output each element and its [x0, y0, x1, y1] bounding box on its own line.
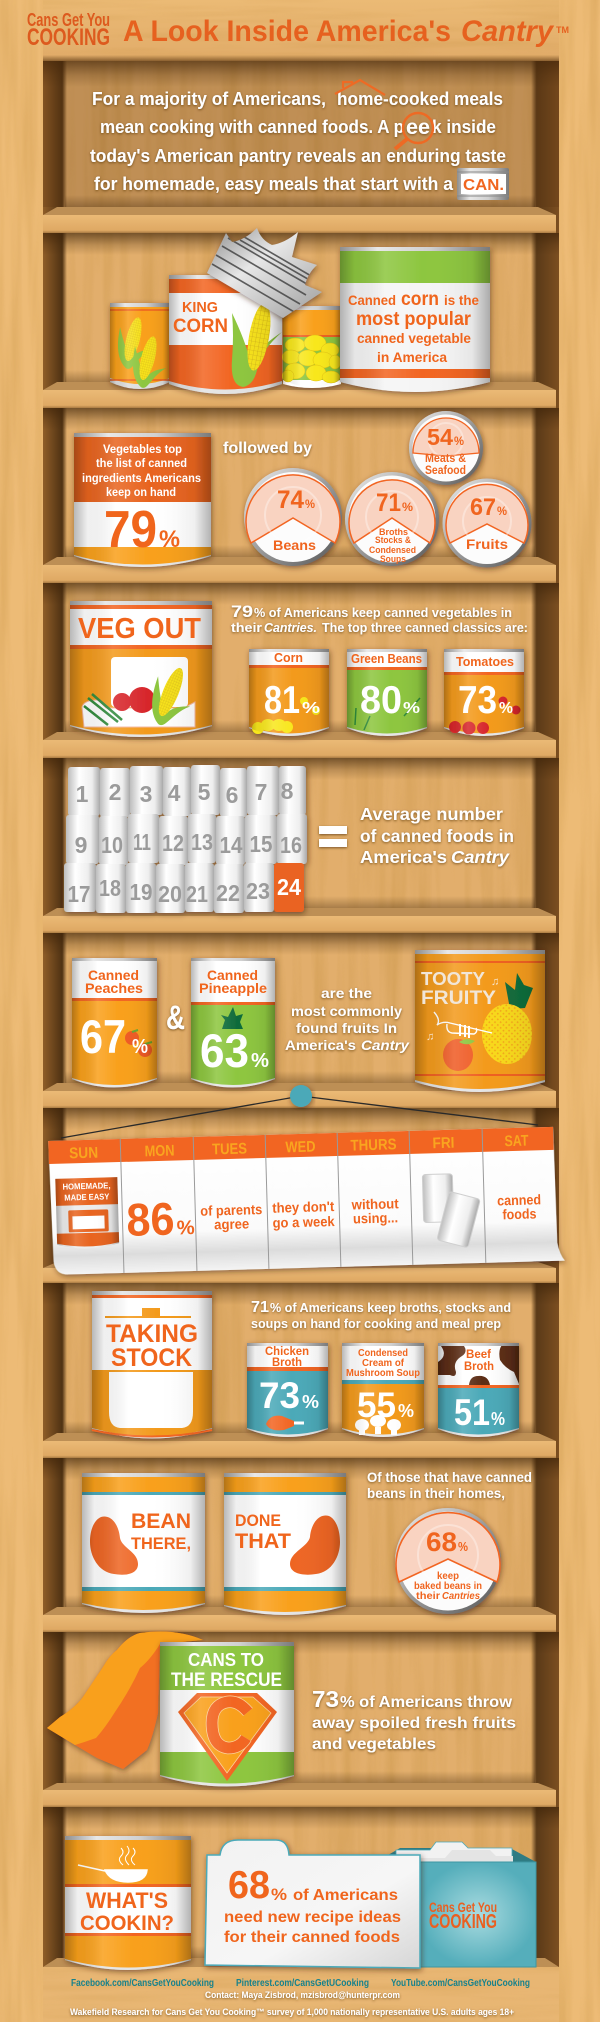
can: beef broth 51%: Broth	[464, 1361, 494, 1373]
stack of 24 cans: 2	[109, 779, 121, 805]
can: tomatoes 73%: Tomatoes	[456, 655, 514, 669]
can: green beans 80%	[347, 649, 427, 736]
intro paragraph: mean cooking with canned foods. A p	[100, 117, 404, 137]
can: Bean There: BEAN	[131, 1510, 191, 1533]
lid: 68% baked beans: baked beans in	[414, 1581, 482, 1592]
folder logo	[429, 1899, 497, 1933]
recipe folder	[383, 1842, 536, 1967]
can: beef broth 51%: %	[491, 1409, 505, 1429]
can: canned pineapple 63%: Pineapple	[199, 980, 267, 996]
footer contact and source: Contact: Maya Zisbrod, mzisbrod@hunterpr.com	[205, 1990, 400, 2000]
recipe card: 68	[228, 1864, 270, 1907]
intro paragraph: For a majority of Americans,	[92, 89, 326, 109]
recipe card: of Americans	[293, 1887, 398, 1904]
text: average number of canned foods: Average number	[360, 804, 503, 824]
logo: Cans Get You Cooking: COOKING	[27, 24, 110, 51]
lid: 74% beans: 74	[277, 486, 304, 514]
icon: bean	[290, 1516, 340, 1575]
stack of 24 cans: 18	[99, 875, 121, 901]
can: What's Cookin?: COOKIN?	[80, 1912, 174, 1935]
recipe card: need new recipe ideas	[224, 1909, 401, 1926]
lid: 74% beans: Beans	[273, 537, 316, 553]
can: condensed cream of mushroom soup 55%: Condensed	[358, 1347, 408, 1359]
lid: 71% broths, stocks and soups: Condensed	[369, 545, 416, 555]
text: most commonly found fruits: are the	[321, 985, 372, 1001]
calendar: canned	[497, 1191, 541, 1208]
can: canned corn is the most popular: in America	[377, 349, 447, 365]
can-lid label: CAN.: CAN.	[463, 177, 504, 194]
can: chicken broth 73%: 73	[259, 1375, 300, 1416]
can: vegetables top the list: ingredients Americans	[82, 473, 201, 485]
folder logo: COOKING	[429, 1911, 497, 1933]
stack of 24 cans: 13	[191, 829, 213, 855]
can: canned pineapple 63%	[191, 958, 275, 1088]
footer links: Pinterest.com/CansGetUCooking	[236, 1978, 369, 1989]
calendar day headers: TUES	[212, 1140, 247, 1158]
cow spots	[438, 1345, 519, 1385]
intro paragraph: home-cooked meals	[337, 89, 503, 109]
stack of 24 cans: 5	[198, 779, 211, 805]
lid: 71% broths, stocks and soups: Broths	[379, 527, 408, 537]
icon: house roof over "home"	[335, 80, 385, 95]
can: King Corn	[169, 275, 282, 394]
can: chicken broth 73%: Broth	[272, 1357, 302, 1369]
title: Cantry	[461, 15, 554, 48]
lid: 54% meats and seafood: 54	[427, 424, 453, 450]
lid: 54% meats and seafood: Meats &	[425, 453, 466, 465]
title: TM	[556, 25, 569, 35]
can: canned corn is the most popular: is the	[444, 292, 479, 308]
can: vegetables top the list	[74, 433, 211, 567]
icon: peach	[443, 1039, 475, 1071]
can: beef broth 51%	[438, 1343, 519, 1437]
text: 71% keep broths, stocks and soups: soups on hand for cooking and meal prep	[251, 1317, 501, 1331]
can: Taking Stock: STOCK	[111, 1344, 192, 1372]
calendar day headers	[69, 1133, 529, 1162]
stack of 24 cans: 14	[220, 832, 243, 858]
can: beef broth 51%: 51	[454, 1392, 490, 1433]
stack of 24 cans: 15	[250, 831, 273, 857]
can: vegetables top the list: 79	[104, 501, 157, 559]
can: vegetables top the list: %	[159, 526, 180, 553]
can: chicken broth 73%: Chicken	[265, 1346, 309, 1358]
stack of 24 cans: 1	[76, 781, 89, 807]
calendar day headers: MON	[144, 1142, 175, 1160]
can: Cans to the Rescue: CANS TO	[188, 1650, 264, 1670]
can: Taking Stock: TAKING	[106, 1320, 198, 1348]
footer links: Facebook.com/CansGetYouCooking	[71, 1978, 214, 1989]
lid: 68% baked beans: their	[416, 1591, 440, 1602]
recipe card	[205, 1840, 420, 1968]
footer links	[71, 1978, 530, 1989]
can: Done That: THAT	[235, 1530, 291, 1553]
calendar: using...	[353, 1209, 398, 1227]
icon: magnifying glass	[395, 113, 433, 149]
icon: superhero C emblem	[178, 1693, 277, 1781]
can: vegetables top the list: keep on hand	[106, 487, 176, 499]
stack of 24 cans: 10	[101, 832, 123, 858]
lid: 68% baked beans: keep	[437, 1571, 459, 1582]
calendar: 86	[126, 1193, 175, 1246]
can: corn 81%: %	[302, 700, 320, 717]
can: condensed cream of mushroom soup 55%: Mushroom Soup	[346, 1367, 420, 1379]
can: tomatoes 73%: %	[499, 700, 513, 717]
lid: 67% fruits: 67	[470, 494, 496, 521]
stack of 24 cans: 7	[255, 779, 267, 805]
text: 73% throw away spoiled produce: % of Americans throw	[340, 1694, 513, 1711]
calendar: go a week	[272, 1213, 335, 1231]
calendar: %	[176, 1217, 195, 1239]
icon: mushrooms	[355, 1415, 401, 1435]
stack of 24 cans: 9	[75, 832, 87, 858]
can: Cans to the Rescue: THE RESCUE	[171, 1669, 282, 1691]
can: canned peaches 67%: Canned	[88, 967, 139, 983]
lid: 74% beans: %	[305, 497, 315, 511]
lid: 68% baked beans	[395, 1508, 501, 1614]
footer contact and source	[70, 1990, 514, 2017]
can: condensed cream of mushroom soup 55%: Cream of	[362, 1357, 404, 1369]
stack of 24 cans: 20	[158, 881, 182, 907]
text: 71% keep broths, stocks and soups	[251, 1299, 511, 1331]
lid: 54% meats and seafood: %	[454, 434, 464, 448]
mini can: homemade, made easy: HOMEMADE,	[62, 1180, 111, 1192]
can: canned pineapple 63%: 63	[200, 1024, 249, 1077]
can: vegetables top the list: Vegetables top	[103, 444, 182, 456]
lid: 74% beans	[244, 468, 342, 566]
text: most commonly found fruits: found fruits In	[296, 1020, 397, 1036]
text: 73% throw away spoiled produce	[312, 1686, 516, 1753]
lid: 68% baked beans: 68	[426, 1527, 457, 1557]
stack of 24 cans: 4	[168, 780, 181, 806]
stack of 24 cans: 8	[281, 778, 294, 804]
can: Tooty Fruity: FRUITY	[421, 988, 496, 1009]
text: 79% keep canned vegetables: Cantries.	[264, 621, 317, 635]
recipe card: %	[271, 1885, 287, 1904]
text: 79% keep canned vegetables: The top three canned classics are:	[322, 621, 528, 635]
footer contact and source: Wakefield Research for Cans Get You Cooking™ survey of 1,000 nationally representative U.S. adults ages 18+	[70, 2007, 514, 2017]
can: Bean There: THERE,	[131, 1534, 191, 1553]
recipe card: for their canned foods	[224, 1929, 400, 1946]
can: canned pineapple 63%: Canned	[207, 967, 258, 983]
stack of 24 cans	[64, 765, 307, 913]
stack of 24 cans: 24	[277, 874, 301, 900]
lid: 68% baked beans: %	[458, 1539, 468, 1554]
logo: Cans Get You Cooking: Cans Get You	[27, 10, 110, 30]
text: 71% keep broths, stocks and soups: % of Americans keep broths, stocks and	[270, 1301, 511, 1315]
can: canned peaches 67%: %	[132, 1036, 148, 1058]
text: most commonly found fruits: Cantry	[361, 1037, 410, 1053]
lid: 54% meats and seafood	[409, 411, 483, 485]
can: canned peaches 67%	[72, 958, 157, 1088]
calendar hanging string and pin	[61, 1085, 538, 1138]
can: Tooty Fruity: ♫	[491, 976, 499, 988]
title: A Look Inside America's	[123, 15, 451, 48]
calendar: they don't	[272, 1198, 335, 1216]
text: average number of canned foods: America's	[360, 847, 447, 867]
text: most commonly found fruits	[285, 985, 410, 1053]
equals sign	[319, 826, 347, 847]
stack of 24 cans: 11	[133, 829, 151, 855]
text: 71% keep broths, stocks and soups: 71	[251, 1299, 269, 1316]
can: beef broth 51%: Beef	[466, 1349, 491, 1361]
can: Done That	[224, 1473, 346, 1615]
can: canned corn is the most popular: Canned	[348, 292, 396, 308]
mini can: homemade, made easy: MADE EASY	[64, 1191, 110, 1203]
can: tomatoes 73%: 73	[458, 679, 497, 722]
icon: orange cape	[47, 1632, 203, 1769]
intro paragraph: today's American pantry reveals an enduring taste	[90, 146, 506, 166]
calendar: of parents	[200, 1201, 263, 1219]
calendar day headers: SAT	[504, 1133, 529, 1150]
mini can: homemade, made easy	[55, 1177, 119, 1249]
icon: bean	[90, 1517, 138, 1575]
lid: 54% meats and seafood: Seafood	[425, 465, 466, 477]
folder logo: Cans Get You	[429, 1899, 497, 1915]
text: 73% throw away spoiled produce: 73	[312, 1686, 339, 1712]
lid: 71% broths, stocks and soups: %	[402, 500, 413, 514]
can: corn 81%	[249, 649, 329, 736]
can: Cans to the Rescue	[160, 1642, 294, 1786]
footer links: YouTube.com/CansGetYouCooking	[391, 1978, 530, 1989]
text: average number of canned foods: of canned foods in	[360, 826, 514, 846]
icon: trumpet	[434, 1012, 492, 1038]
can: Tooty Fruity	[415, 950, 545, 1092]
icon: pot	[105, 1308, 193, 1428]
can: What's Cookin?	[65, 1836, 191, 1970]
can: green beans 80%: %	[403, 700, 420, 717]
icon: white dish with vegetables	[82, 657, 199, 731]
lid: 71% broths, stocks and soups: Soups	[380, 554, 406, 564]
text: 79% keep canned vegetables: 79	[231, 602, 253, 621]
icon: corn cob on label	[232, 302, 282, 387]
text: 79% keep canned vegetables: their	[231, 621, 262, 635]
lid: 68% baked beans: Cantries	[442, 1591, 480, 1602]
text: average number of canned foods: Cantry	[451, 847, 510, 867]
two blank cans	[422, 1173, 482, 1249]
lid: 71% broths, stocks and soups	[345, 472, 439, 566]
calendar day headers: THURS	[350, 1136, 397, 1155]
calendar: without	[350, 1195, 399, 1213]
icon: chicken leg	[266, 1416, 304, 1430]
can: Veg Out	[70, 601, 212, 737]
intro paragraph: k inside	[432, 117, 496, 137]
can: King Corn: KING	[182, 299, 218, 316]
can: chicken broth 73%: %	[302, 1392, 319, 1412]
can: condensed cream of mushroom soup 55%: 55	[357, 1386, 396, 1425]
can: condensed cream of mushroom soup 55%	[342, 1343, 424, 1437]
can: canned pineapple 63%: %	[251, 1050, 269, 1072]
can: green beans 80%: Green Beans	[351, 652, 422, 666]
text: 79% keep canned vegetables	[231, 602, 528, 635]
text: 73% throw away spoiled produce: away spoiled fresh fruits	[312, 1715, 516, 1732]
text: of those that have canned beans	[367, 1469, 532, 1501]
intro paragraph	[90, 80, 506, 194]
can: canned peaches 67%: Peaches	[85, 980, 143, 996]
can: canned corn is the most popular	[340, 247, 490, 392]
stack of 24 cans: 12	[162, 830, 184, 856]
calendar: agree	[214, 1215, 250, 1232]
lid: 71% broths, stocks and soups: Stocks &	[375, 535, 411, 545]
intro paragraph: for homemade, easy meals that start with a	[94, 174, 454, 194]
stack of 24 cans: 21	[186, 881, 208, 907]
wooden shelves	[43, 207, 559, 2022]
can: vegetables top the list: the list of canned	[96, 458, 187, 470]
can: canned corn is the most popular: canned vegetable	[357, 330, 471, 346]
calendar day headers: WED	[285, 1139, 316, 1156]
can: chicken broth 73%	[247, 1343, 328, 1437]
text: most commonly found fruits: most commonly	[291, 1003, 402, 1019]
stack of 24 cans: 3	[140, 781, 152, 807]
text: most commonly found fruits: America's	[285, 1037, 356, 1053]
can: Tooty Fruity: TOOTY	[421, 968, 486, 989]
text: average number of canned foods	[360, 804, 514, 867]
can: green beans 80%: 80	[360, 679, 402, 722]
lid: 67% fruits: Fruits	[466, 536, 508, 552]
icon: peeled can lid	[207, 228, 322, 318]
calendar	[48, 1127, 565, 1275]
text: followed by: followed by	[223, 440, 312, 457]
can: Bean There	[82, 1473, 205, 1613]
can: small corn can	[110, 303, 170, 390]
stack of 24 cans: 19	[130, 879, 152, 905]
lid: 67% fruits	[442, 478, 532, 568]
calendar day headers: SUN	[69, 1145, 98, 1162]
can: corn 81%: Corn	[274, 651, 303, 665]
intro paragraph: ee	[406, 116, 430, 139]
can: Done That: DONE	[235, 1511, 281, 1530]
can-lid label: CAN.	[457, 168, 509, 200]
logo: Cans Get You Cooking	[27, 10, 110, 51]
can: Taking Stock	[92, 1291, 212, 1438]
calendar day headers: FRI	[432, 1135, 455, 1152]
can: canned corn is the most popular: most popular	[356, 309, 472, 330]
calendar: foods	[502, 1205, 537, 1222]
stack of 24 cans: 23	[246, 878, 270, 904]
text: of those that have canned beans: beans in their homes,	[367, 1485, 505, 1501]
icon: pineapple	[482, 973, 533, 1064]
can: What's Cookin?: WHAT'S	[86, 1888, 168, 1913]
can: canned corn is the most popular: corn	[401, 289, 439, 310]
can: canned peaches 67%: 67	[80, 1010, 126, 1063]
can: Tooty Fruity: ♫	[426, 1031, 434, 1043]
icon: frying pan with steam	[78, 1846, 147, 1882]
can: condensed cream of mushroom soup 55%: %	[398, 1401, 414, 1421]
stack of 24 cans: 17	[68, 881, 90, 907]
text: of those that have canned beans: Of those that have canned	[367, 1469, 532, 1485]
ampersand: &	[166, 999, 185, 1037]
can: tomatoes 73%	[444, 649, 524, 736]
can: King Corn: CORN	[173, 316, 228, 337]
can: Veg Out: VEG OUT	[78, 613, 201, 645]
stack of 24 cans: 16	[280, 832, 302, 858]
stack of 24 cans: 22	[216, 880, 240, 906]
lid: 71% broths, stocks and soups: 71	[376, 489, 401, 517]
text: 79% keep canned vegetables: % of Americans keep canned vegetables in	[254, 606, 512, 620]
can: corn kernels	[282, 306, 341, 388]
text: 73% throw away spoiled produce: and vegetables	[312, 1736, 436, 1753]
stack of 24 cans: 6	[226, 782, 238, 808]
lid: 67% fruits: %	[497, 504, 507, 518]
can: corn 81%: 81	[264, 679, 300, 722]
